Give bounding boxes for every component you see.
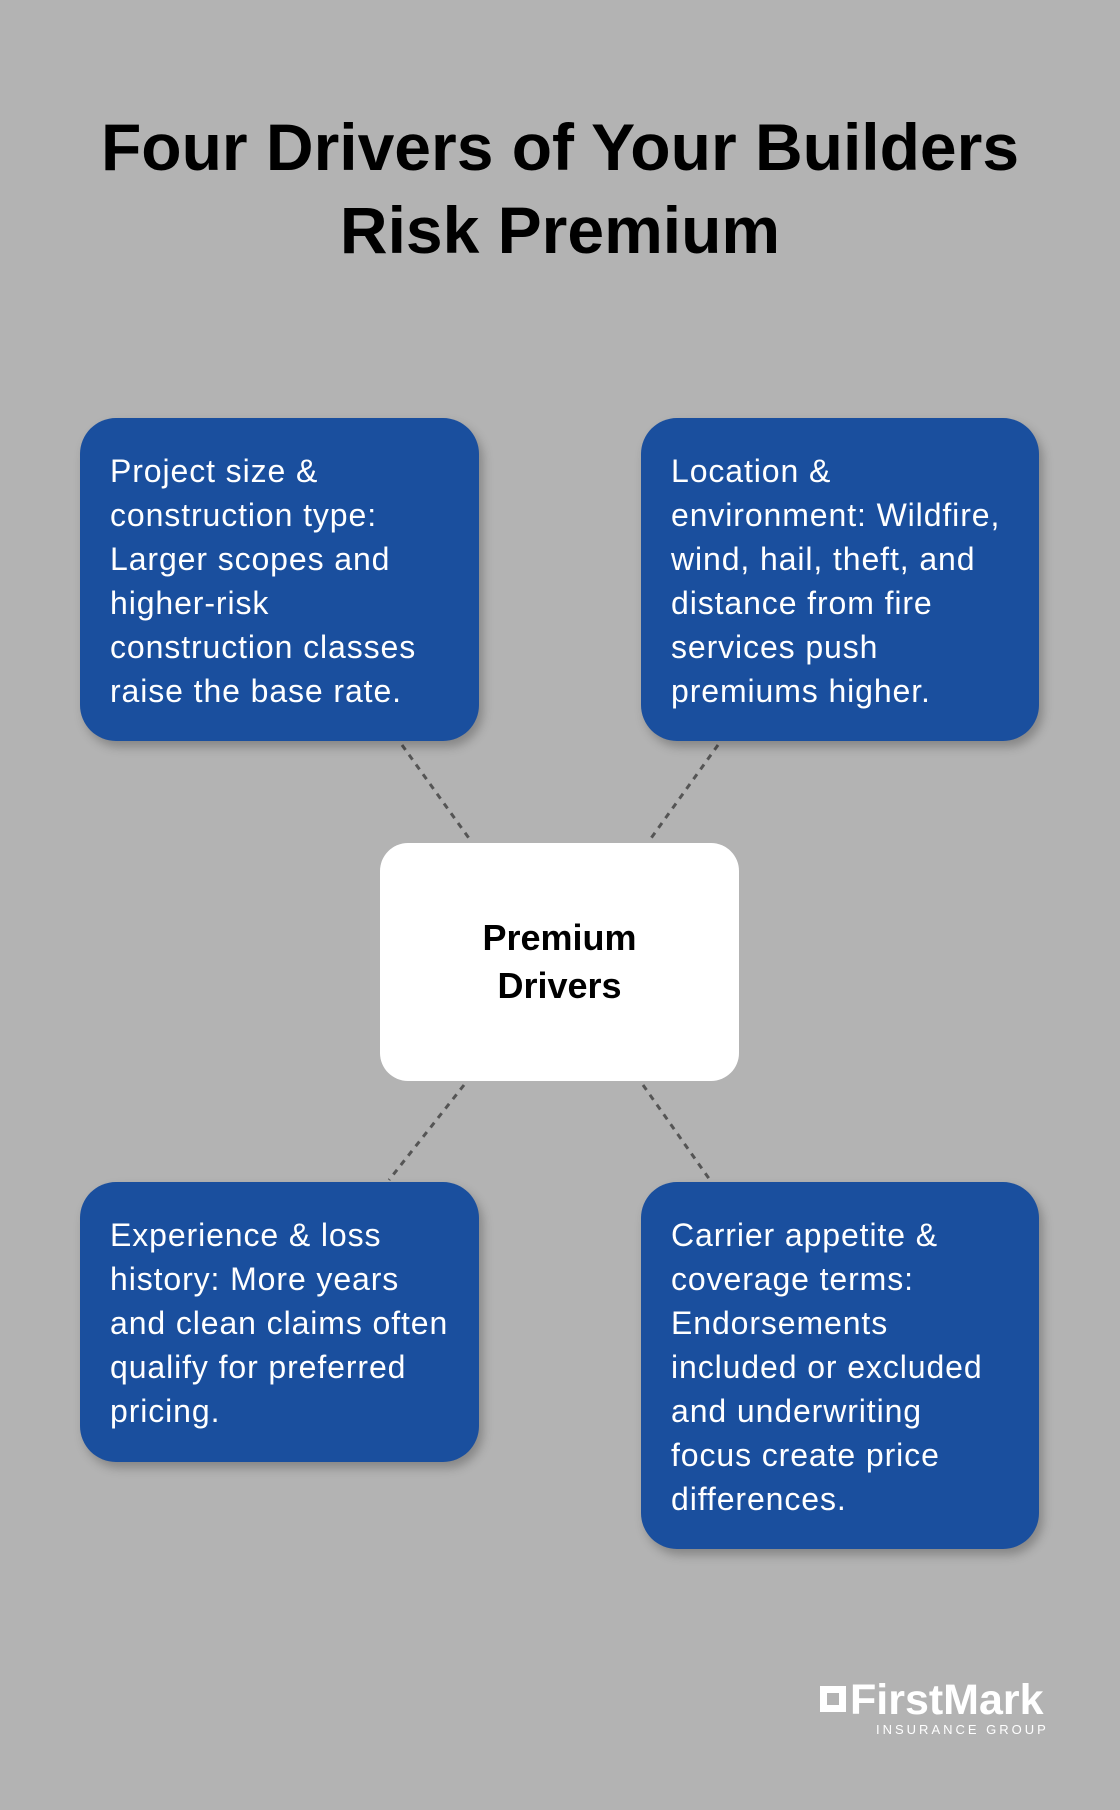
panel: location: services push [671, 629, 878, 665]
center node: Drivers [497, 965, 622, 1006]
panel: project size: Project size & [110, 453, 318, 489]
panel: carrier appetite: Carrier appetite & [671, 1217, 938, 1253]
panel: project size: construction type: [110, 497, 377, 533]
panel: carrier appetite: and underwriting [671, 1393, 922, 1429]
panel: project size: construction classes [110, 629, 416, 665]
panel: location: wind, hail, theft, and [671, 541, 975, 577]
panel: carrier appetite: differences. [671, 1481, 847, 1517]
panel: location: premiums higher. [671, 673, 931, 709]
panel: experience [80, 1182, 479, 1462]
panel: project size: raise the base rate. [110, 673, 402, 709]
panel: experience: and clean claims often [110, 1305, 448, 1341]
panel: experience: Experience & loss [110, 1217, 381, 1253]
panel: project size: higher-risk [110, 585, 269, 621]
title: Risk Premium [340, 193, 780, 267]
panel: carrier appetite [641, 1182, 1039, 1549]
panel: project size: Larger scopes and [110, 541, 390, 577]
panel: experience: history: More years [110, 1261, 399, 1297]
logo: INSURANCE GROUP [876, 1722, 1049, 1737]
panel: carrier appetite: included or excluded [671, 1349, 983, 1385]
center node: Premium [482, 917, 637, 958]
panel: location: Location & [671, 453, 831, 489]
panel: location: environment: Wildfire, [671, 497, 1000, 533]
panel: experience: pricing. [110, 1393, 220, 1429]
center node [380, 843, 739, 1081]
panel: project size [80, 418, 479, 741]
panel: location [641, 418, 1039, 741]
title: Four Drivers of Your Builders [101, 110, 1019, 184]
panel: carrier appetite: Endorsements [671, 1305, 888, 1341]
panel: carrier appetite: focus create price [671, 1437, 940, 1473]
panel: location: distance from fire [671, 585, 933, 621]
logo [820, 1676, 1049, 1737]
panel: carrier appetite: coverage terms: [671, 1261, 914, 1297]
panel: experience: qualify for preferred [110, 1349, 406, 1385]
title [101, 110, 1019, 267]
logo: FirstMark [850, 1676, 1044, 1724]
